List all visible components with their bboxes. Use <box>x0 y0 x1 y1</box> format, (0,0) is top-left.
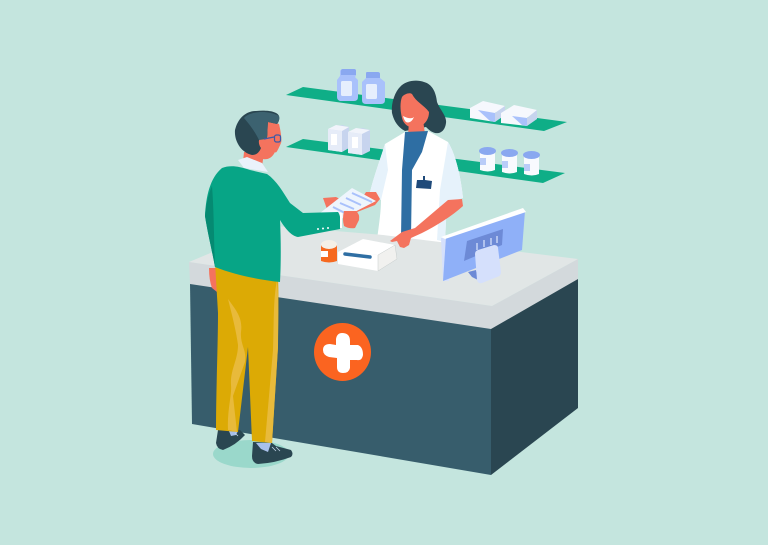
hand under prescription <box>323 197 342 212</box>
icon: blue bottles on upper shelf <box>337 69 385 104</box>
sweater cuff buttons <box>317 227 329 230</box>
monitor side edge <box>441 237 449 281</box>
pharmacist hair <box>392 81 446 133</box>
customer hair <box>235 111 279 155</box>
pharmacist face <box>400 93 429 128</box>
icon: orange medical cross <box>314 323 371 381</box>
counter top surface <box>189 226 578 306</box>
icon: jars on lower shelf right <box>479 147 540 176</box>
monitor vent panel <box>464 229 503 261</box>
customer green sweater <box>205 166 341 282</box>
customer cuff sliver <box>340 213 342 228</box>
pharmacist <box>370 81 463 246</box>
monitor top edge <box>441 208 526 239</box>
upper shelf <box>286 87 567 131</box>
icon: medicine box on counter <box>338 239 397 271</box>
customer <box>205 111 380 468</box>
monitor stand base <box>468 270 478 280</box>
customer shoe laces <box>235 433 280 451</box>
customer socks <box>229 431 271 452</box>
icon: computer monitor <box>441 208 526 283</box>
counter top lip <box>189 259 578 329</box>
floor shadow <box>213 440 289 468</box>
prescription paper <box>320 188 380 219</box>
customer left shoe <box>216 430 245 450</box>
trouser highlights <box>228 299 245 432</box>
pharmacist neck <box>408 120 425 140</box>
coat pocket <box>416 176 432 189</box>
lower shelf <box>286 139 565 183</box>
counter side panel <box>491 278 578 475</box>
customer right shoe <box>252 442 292 464</box>
counter <box>189 226 578 475</box>
counter front panel <box>190 283 491 475</box>
pharmacist shirt and tie strip <box>401 131 428 238</box>
customer trousers <box>215 262 278 443</box>
monitor back <box>443 211 525 281</box>
icon: orange pill bottle <box>321 240 337 262</box>
customer hair highlight <box>244 112 279 140</box>
customer hanging hand <box>209 268 217 292</box>
monitor stand <box>475 245 501 283</box>
customer face <box>250 118 281 159</box>
icon: boxes on lower shelf <box>328 125 370 155</box>
sweater shading <box>205 186 215 267</box>
icon: boxes on upper shelf right <box>470 101 537 126</box>
pharmacist arm and pointing hand <box>390 199 463 248</box>
pharmacist lab coat <box>370 131 463 246</box>
customer hand <box>343 211 359 228</box>
customer glasses <box>264 135 280 142</box>
pharmacist smile <box>403 116 414 122</box>
coat shading <box>370 144 388 200</box>
customer neck <box>243 152 264 167</box>
customer shirt collar <box>238 157 268 172</box>
